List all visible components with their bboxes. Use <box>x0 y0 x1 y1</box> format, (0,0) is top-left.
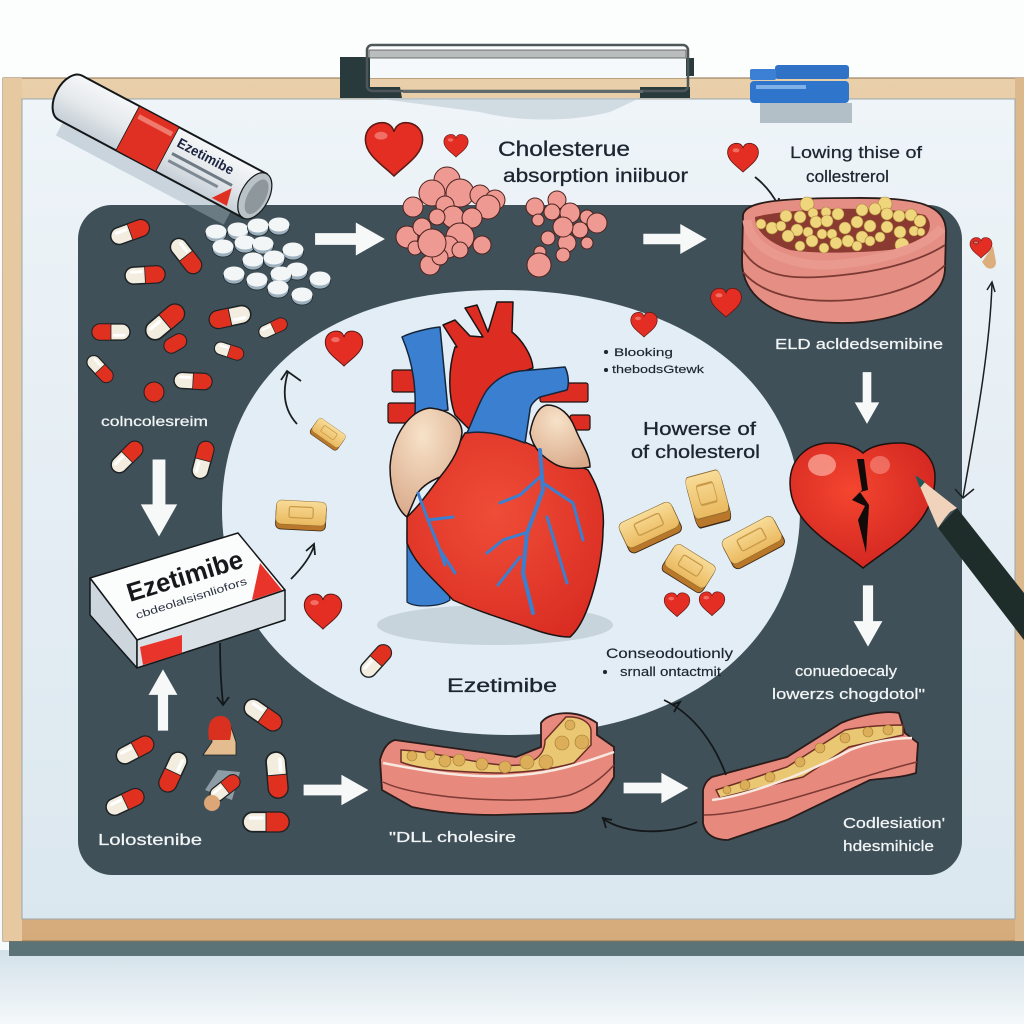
center heart <box>377 302 613 645</box>
small heart near intestine <box>711 288 741 317</box>
clipboard clip <box>340 45 694 120</box>
ezetimibe tube: Ezetimibe <box>175 135 237 178</box>
small curved arrows <box>281 371 315 579</box>
label: cholesterol bottom right: hdesmihicle <box>843 838 934 855</box>
red and white capsules upper left <box>84 217 289 480</box>
label: consequently lowers <box>772 663 925 703</box>
dark panel <box>78 205 962 875</box>
label: cholesterol bottom right: Codlesiation' <box>843 815 945 832</box>
heading: lowering <box>790 143 922 186</box>
heading: however of cholesterol: of cholesterol <box>631 442 760 462</box>
arrow down from broken heart <box>854 585 882 647</box>
right atrium <box>530 405 590 468</box>
pencil <box>915 475 1024 640</box>
inferior vena cava <box>407 530 450 606</box>
arrow down left <box>141 459 177 537</box>
bullet text consequentially: srnall ontactmit <box>620 665 722 679</box>
arrow down to broken heart <box>855 372 879 424</box>
thin arrow under box <box>217 643 229 705</box>
title: cholesterol absorption inhibitor: absorption iniibuor <box>503 166 689 187</box>
bullet text blocking: thebodsGtewk <box>612 364 705 376</box>
yellow tablets <box>275 417 786 595</box>
coronary vessels <box>418 450 583 613</box>
heading: lowering: collestrerol <box>806 167 889 186</box>
arrow lower mid <box>624 773 688 803</box>
title: cholesterol absorption inhibitor <box>498 138 689 187</box>
intestine segment top right <box>742 197 946 323</box>
label: cholesterol bottom right <box>843 815 945 855</box>
bullet text blocking: Blooking <box>614 347 673 359</box>
superior vena cava <box>402 327 448 415</box>
bullet text consequentially: Conseodoutionly <box>606 645 733 661</box>
arrow lower left <box>304 775 368 805</box>
label: ELD: ELD acldedsemibine <box>775 336 943 353</box>
label: consequently lowers: lowerzs chogdotol" <box>772 686 925 703</box>
spilled white pills <box>206 218 330 305</box>
label: ezetimibe center: Ezetimibe <box>447 676 557 697</box>
red stubs <box>388 370 590 430</box>
bullet text blocking <box>604 347 705 376</box>
cholesterol clumps <box>396 167 607 277</box>
small capsule center <box>357 641 395 681</box>
label: lolostenibe: Lolostenibe <box>98 832 202 849</box>
arrow up to box <box>149 669 177 731</box>
ventricle body <box>407 430 603 637</box>
hearts around center <box>304 312 725 629</box>
pulmonary artery <box>467 367 568 443</box>
heart with pointer <box>728 143 779 206</box>
heading: lowering: Lowing thise of <box>790 143 922 162</box>
title: cholesterol absorption inhibitor: Cholesterue <box>498 138 630 161</box>
ezetimibe box <box>90 533 285 668</box>
floor shadow under board <box>0 940 1024 1024</box>
hearts top <box>365 123 468 176</box>
central light ellipse <box>222 290 800 735</box>
bullet text consequentially <box>603 645 733 679</box>
label: consequently lowers: conuedoecaly <box>795 663 898 680</box>
aorta <box>443 302 533 430</box>
arrow: pills to cholesterol clumps <box>315 223 385 255</box>
small heart with curved arrow right <box>955 238 996 498</box>
heading: however of cholesterol <box>631 419 760 462</box>
arrow: clumps to intestine <box>643 224 707 254</box>
left atrium <box>390 408 462 517</box>
label: colesterim: colncolesreim <box>101 413 208 429</box>
lower intestine 2 <box>703 712 918 840</box>
label: DLL cholesterol: "DLL cholesire <box>389 829 516 846</box>
heading: however of cholesterol: Howerse of <box>643 419 757 439</box>
curved arrows to lower intestine <box>602 700 726 831</box>
ezetimibe tube <box>38 69 279 238</box>
ezetimibe box: cbdeolalsisnliofors <box>134 576 249 622</box>
broken heart <box>790 443 935 568</box>
lower left capsules <box>103 696 289 832</box>
blue markers <box>750 65 852 123</box>
ezetimibe box: Ezetimibe <box>123 544 247 608</box>
lower intestine 1 <box>380 713 614 815</box>
